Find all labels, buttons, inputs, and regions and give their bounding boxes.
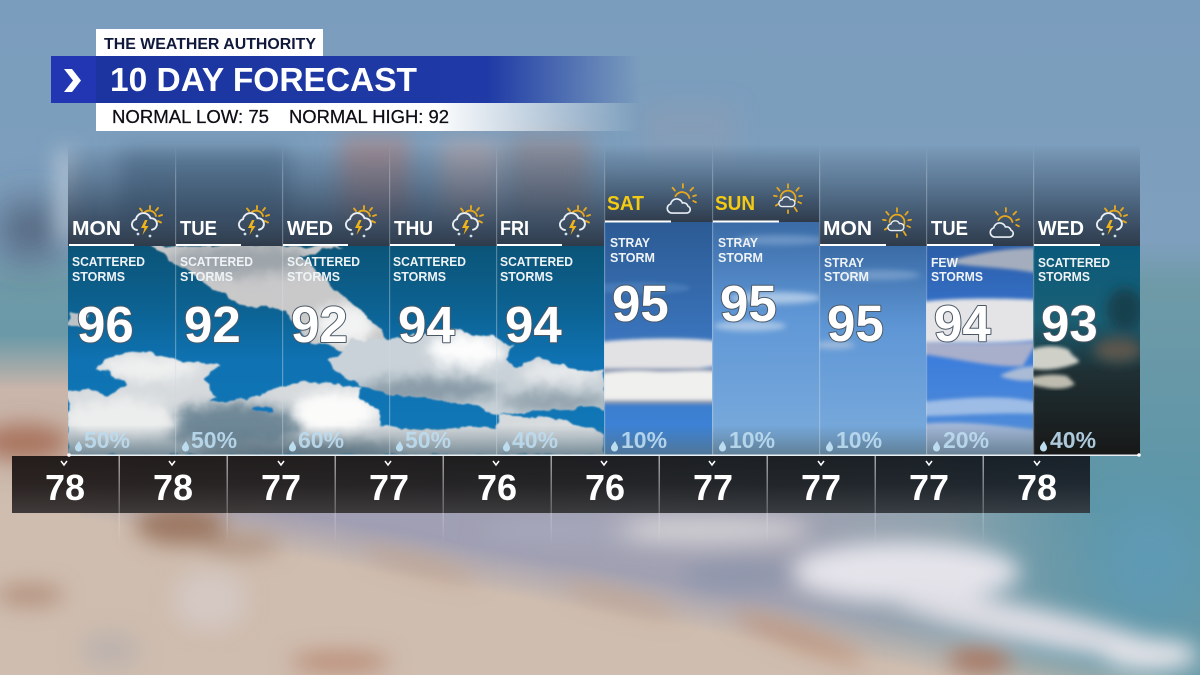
forecast column: second Monday: [820, 208, 911, 453]
forecast column: second Wednesday: 40%: [1050, 427, 1096, 453]
network label: THE WEATHER AUTHORITY: [104, 36, 316, 53]
forecast column: Friday: FRI: [500, 218, 529, 240]
forecast column: Saturday: STORM: [610, 250, 655, 265]
forecast column: Friday: 94: [505, 296, 562, 353]
forecast column: second Monday: STORM: [824, 269, 869, 284]
forecast column: second Tuesday: [927, 208, 1019, 453]
forecast column: second Monday: 95: [827, 295, 884, 352]
forecast column: Thursday: SCATTERED: [393, 254, 466, 269]
forecast column: Monday: MON: [72, 218, 121, 240]
title banner: 10 DAY FORECAST: [110, 61, 417, 98]
forecast column: Wednesday: 60%: [298, 427, 344, 453]
forecast column: Friday: [497, 206, 590, 453]
forecast column: Wednesday: STORMS: [287, 269, 340, 284]
sky, Saturday: [604, 222, 712, 454]
icon: scattered storms: [560, 206, 590, 237]
forecast column: Tuesday: 92: [184, 296, 241, 353]
forecast column: Thursday: [390, 206, 483, 453]
low temperature values: 77: [369, 467, 409, 508]
forecast column: second Wednesday: 93: [1041, 295, 1098, 352]
normal temperatures bar: [96, 103, 640, 131]
icon: sun and light shower: [883, 208, 911, 237]
panel: header band gradients for day columns: [68, 145, 1140, 246]
title banner: [51, 56, 640, 103]
forecast column: Tuesday: [176, 206, 269, 453]
forecast column: Monday: 96: [77, 296, 134, 353]
forecast column: Tuesday: TUE: [180, 218, 217, 240]
forecast column: Sunday: 95: [720, 275, 777, 332]
network label: [96, 29, 323, 56]
forecast column: Thursday: 50%: [405, 427, 451, 453]
icon: scattered storms: [346, 206, 376, 237]
forecast column: second Tuesday: 94: [934, 295, 991, 352]
title block: [51, 29, 640, 131]
low temperature values: [45, 467, 1057, 508]
icon: scattered storms: [453, 206, 483, 237]
forecast column: Tuesday: SCATTERED: [180, 254, 253, 269]
forecast column: second Wednesday: SCATTERED: [1038, 255, 1110, 270]
normal temperatures bar: NORMAL LOW: 75: [112, 107, 269, 127]
low temperature values: 76: [477, 467, 517, 508]
low temperature values: 78: [45, 467, 85, 508]
icon: scattered storms: [1097, 206, 1127, 237]
low temperature values: 78: [1017, 467, 1057, 508]
forecast column: second Wednesday: WED: [1038, 218, 1084, 240]
forecast column: Sunday: SUN: [715, 193, 755, 215]
sky with cumulus clouds, Monday to Friday: [65, 244, 610, 460]
forecast column: Monday: SCATTERED: [72, 254, 145, 269]
panel: overnight lows row: [12, 456, 1090, 546]
forecast column: Wednesday: 92: [291, 296, 348, 353]
forecast column: Saturday: STRAY: [610, 235, 650, 250]
forecast column: Sunday: STRAY: [718, 235, 758, 250]
low temperature values: 77: [693, 467, 733, 508]
forecast column: Sunday: STORM: [718, 250, 763, 265]
forecast column: Friday: SCATTERED: [500, 254, 573, 269]
forecast column: Saturday: [605, 184, 696, 453]
forecast column: second Monday: MON: [823, 218, 872, 240]
forecast column: Wednesday: WED: [287, 218, 333, 240]
forecast column: second Tuesday: TUE: [931, 218, 968, 240]
forecast column: Thursday: 94: [398, 296, 455, 353]
forecast column: Tuesday: 50%: [191, 427, 237, 453]
icon: scattered storms: [132, 206, 162, 237]
forecast column: Thursday: THU: [394, 218, 433, 240]
icon: sun and cloud: [990, 208, 1019, 237]
sky, second Monday: [815, 246, 926, 455]
low temperature values: 77: [801, 467, 841, 508]
forecast column: Monday: 50%: [84, 427, 130, 453]
icon: sun and cloud: [667, 184, 696, 213]
low temperature values: 78: [153, 467, 193, 508]
low temperature values: 77: [909, 467, 949, 508]
sky, second Wednesday: [1030, 246, 1143, 455]
forecast column: Saturday: SAT: [607, 193, 644, 215]
sky, second Tuesday: [922, 246, 1037, 458]
forecast column: Thursday: STORMS: [393, 269, 446, 284]
forecast column: Monday: [69, 206, 162, 453]
forecast column: second Monday: 10%: [836, 427, 882, 453]
forecast column: second Tuesday: STORMS: [931, 269, 983, 284]
sky, Sunday: [712, 222, 825, 455]
normal temperatures bar: NORMAL HIGH: 92: [289, 107, 449, 127]
icon: scattered storms: [239, 206, 269, 237]
forecast column: Saturday: 95: [612, 275, 669, 332]
panel: daily highs background imagery: [65, 222, 1143, 460]
low temperature values: 76: [585, 467, 625, 508]
forecast column: Wednesday: SCATTERED: [287, 254, 360, 269]
forecast column: Friday: STORMS: [500, 269, 553, 284]
low temperature values: 77: [261, 467, 301, 508]
forecast column: Tuesday: STORMS: [180, 269, 233, 284]
forecast column: Friday: 40%: [512, 427, 558, 453]
forecast column: second Wednesday: [1034, 206, 1127, 453]
forecast column: Sunday: [713, 184, 802, 453]
forecast column: second Tuesday: 20%: [943, 427, 989, 453]
forecast column: second Tuesday: FEW: [931, 255, 959, 270]
icon: sun and light shower: [774, 184, 802, 213]
forecast column: Monday: STORMS: [72, 269, 125, 284]
forecast column: Saturday: 10%: [621, 427, 667, 453]
forecast column: second Wednesday: STORMS: [1038, 269, 1090, 284]
forecast column: second Monday: STRAY: [824, 255, 864, 270]
forecast column: Sunday: 10%: [729, 427, 775, 453]
forecast column: Wednesday: [283, 206, 376, 453]
